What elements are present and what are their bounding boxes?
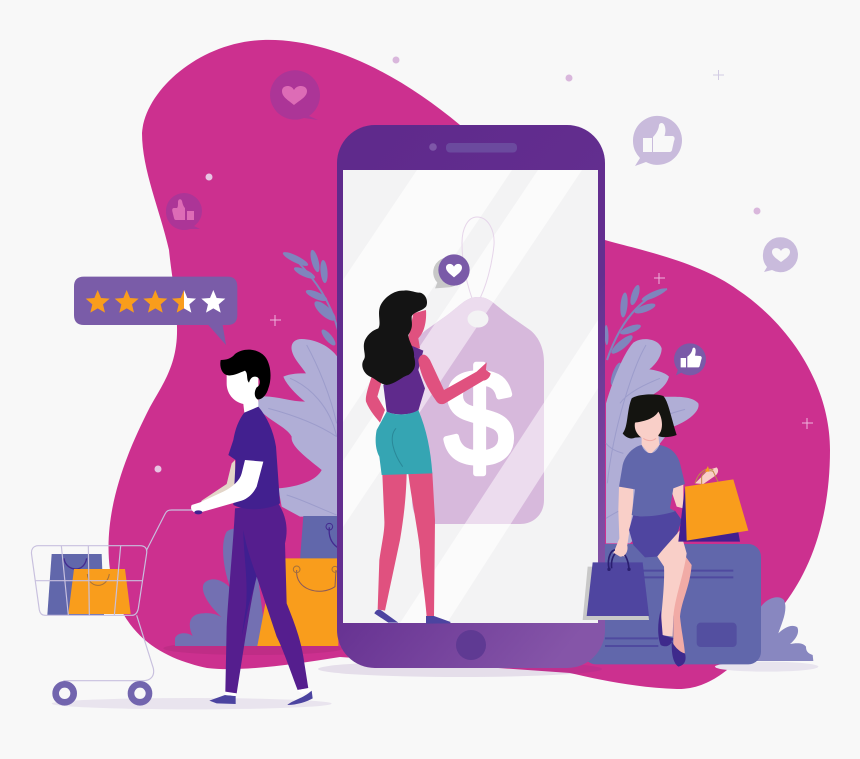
speaker <box>446 143 517 152</box>
neck <box>642 435 659 455</box>
hair <box>220 350 271 399</box>
trousers shade <box>242 530 257 637</box>
hair <box>362 290 427 385</box>
branch left <box>281 249 338 347</box>
blob shadow <box>163 642 343 655</box>
tag body <box>412 297 544 524</box>
bag body <box>587 562 649 616</box>
neck and face <box>408 310 426 348</box>
back leg <box>673 553 692 657</box>
front arm <box>191 460 263 513</box>
shopping cart <box>31 510 193 702</box>
bubble thumb <box>674 343 706 375</box>
suitcase <box>583 544 761 664</box>
hair <box>623 394 677 438</box>
left arm <box>613 487 633 557</box>
hand grip <box>194 510 202 514</box>
bag handles <box>695 469 721 491</box>
tag string <box>462 217 494 314</box>
right hand <box>695 467 718 484</box>
cart wheels <box>56 684 149 702</box>
price tag <box>412 216 544 524</box>
right leg <box>408 473 435 617</box>
shoes <box>209 691 313 705</box>
orange bag <box>257 558 338 646</box>
phone shadow <box>318 661 602 677</box>
home button <box>456 630 486 660</box>
cart bag orange <box>68 569 131 614</box>
left leg <box>378 474 407 611</box>
bubble: thumb top right <box>633 116 682 166</box>
phone <box>337 125 605 668</box>
pink blob <box>109 40 830 689</box>
hand on bag <box>613 546 628 557</box>
socks <box>225 688 312 696</box>
bubble: heart top left <box>270 70 320 120</box>
trousers <box>225 503 308 693</box>
plus marks <box>270 70 813 429</box>
dollar sign: $ <box>445 343 513 493</box>
bag back panel <box>678 487 740 542</box>
cart frame <box>31 510 193 681</box>
head <box>227 370 258 413</box>
shoes <box>658 610 686 667</box>
bag handles <box>608 550 629 569</box>
back arm <box>200 460 236 505</box>
back bush left <box>175 529 267 646</box>
bush right <box>757 597 813 661</box>
top <box>383 345 425 414</box>
group: right scene back <box>583 339 818 672</box>
phone screen <box>343 170 598 623</box>
shirt <box>619 445 685 516</box>
shopping bag orange <box>678 466 748 542</box>
group: left scene <box>31 277 343 709</box>
phone body <box>337 125 605 668</box>
chin shadow <box>643 438 656 441</box>
screen glare <box>343 170 598 623</box>
shoes <box>374 610 451 624</box>
decorative dots <box>154 56 760 472</box>
skirt <box>629 511 682 557</box>
tag hole <box>468 310 488 328</box>
bubble: thumb left <box>166 193 202 230</box>
bubble: heart right <box>763 237 798 272</box>
right arm <box>670 483 683 508</box>
branch right <box>604 284 668 386</box>
skirt <box>376 410 432 475</box>
rating bubble <box>74 277 237 345</box>
front arm <box>418 355 491 404</box>
bag shadow <box>583 567 649 620</box>
bag tag <box>705 466 709 472</box>
back arm <box>366 377 385 423</box>
face <box>635 412 662 440</box>
purple bag <box>300 516 337 560</box>
leaf left <box>257 339 337 517</box>
stars <box>86 290 225 313</box>
leaf right <box>606 339 699 543</box>
ground shadow man <box>52 698 332 709</box>
group: center woman <box>362 254 491 624</box>
camera <box>429 143 437 151</box>
cart bag purple <box>47 554 104 615</box>
shirt <box>228 407 280 509</box>
bag front <box>685 479 748 541</box>
skirt crease <box>392 428 403 467</box>
ground shadow right <box>715 662 818 672</box>
front leg <box>657 530 687 637</box>
tag glare <box>418 297 544 524</box>
left bag <box>583 550 649 620</box>
speech bubble heart <box>433 254 470 288</box>
group: seated woman <box>583 343 748 667</box>
man <box>191 350 313 705</box>
